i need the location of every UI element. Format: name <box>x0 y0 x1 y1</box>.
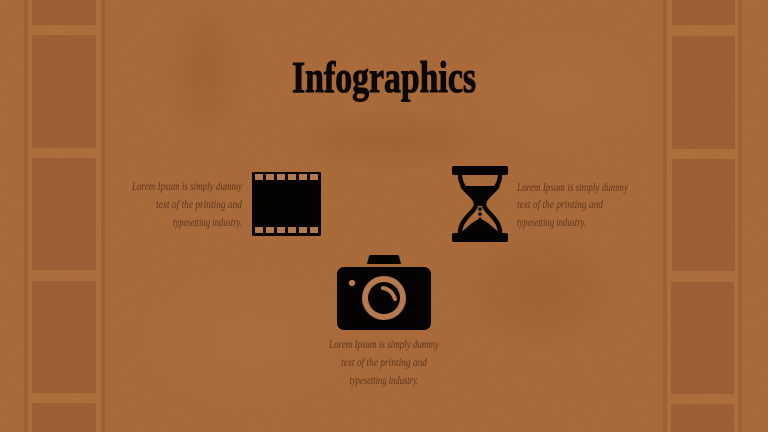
icon: film frame <box>252 172 321 236</box>
text: camera description: Lorem Ipsum is simply dummy <box>328 339 440 351</box>
text: camera description: typesetting industry. <box>350 375 418 387</box>
text: hourglass description <box>516 182 629 229</box>
text: camera description: text of the printing and <box>341 357 427 369</box>
text: camera description <box>328 339 440 387</box>
text: hourglass description: Lorem Ipsum is simply dummy <box>516 182 629 194</box>
text: film description: typesetting industry. <box>173 217 242 229</box>
text: film description <box>131 181 243 229</box>
text: hourglass description: typesetting industry. <box>517 217 586 229</box>
right film strip <box>663 0 742 432</box>
icon: camera <box>337 255 431 330</box>
text: film description: text of the printing and <box>156 199 242 211</box>
title: Infographics <box>292 53 476 102</box>
text: hourglass description: text of the printing and <box>517 199 603 211</box>
left film strip <box>24 0 105 432</box>
icon: hourglass <box>452 166 508 242</box>
text: film description: Lorem Ipsum is simply dummy <box>131 181 243 193</box>
